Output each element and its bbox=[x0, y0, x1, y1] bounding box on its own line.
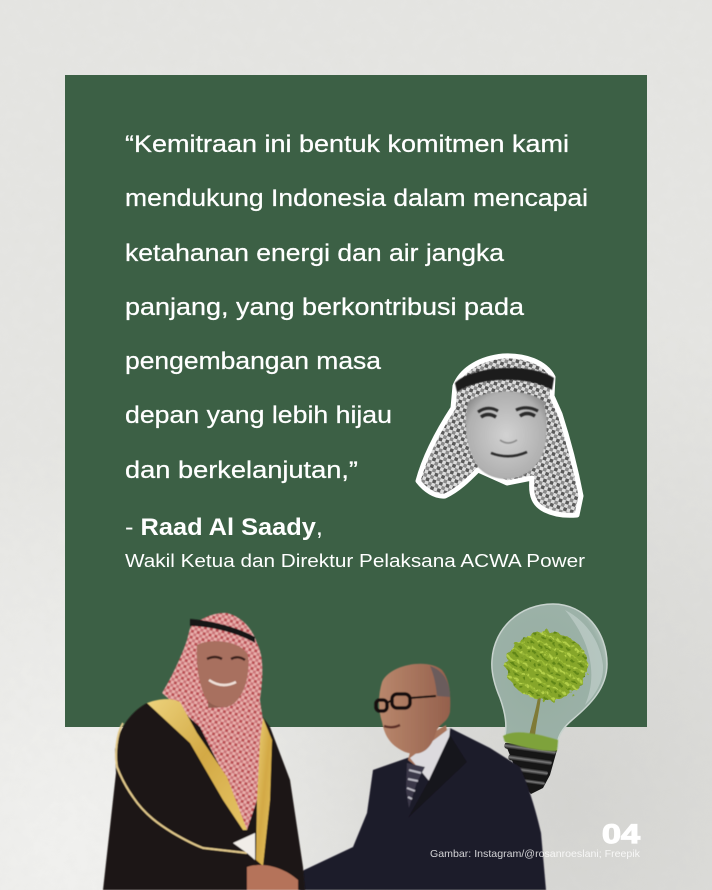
headscarf with white sticker outline bbox=[418, 356, 581, 515]
hair bbox=[430, 666, 450, 697]
gold collar left bbox=[147, 699, 247, 830]
grass bbox=[503, 732, 558, 751]
glasses bbox=[376, 694, 436, 711]
portrait: grayscale sticker of Raad Al Saady bbox=[418, 356, 581, 515]
image credit: Gambar: Instagram/@rosanroeslani; Freepik bbox=[430, 848, 641, 860]
white cuff bbox=[233, 833, 255, 860]
page number: 04 bbox=[602, 819, 640, 849]
glass bbox=[492, 604, 607, 748]
panel: green quote background bbox=[65, 75, 647, 727]
suit bbox=[300, 728, 546, 890]
gold collar right bbox=[256, 718, 272, 866]
quote text block: panjang, yang berkontribusi pada bbox=[125, 294, 524, 321]
quote text block: pengembangan masa bbox=[125, 348, 381, 375]
striped tie bbox=[406, 763, 425, 808]
face features bbox=[478, 408, 538, 456]
face features bbox=[207, 657, 245, 685]
quote text block: mendukung Indonesia dalam mencapai bbox=[125, 185, 588, 212]
glass highlight bbox=[565, 610, 603, 705]
neck bbox=[208, 695, 232, 708]
face bbox=[466, 392, 547, 479]
quote text block: ketahanan energi dan air jangka bbox=[125, 240, 504, 267]
icon: light bulb with tree bbox=[492, 604, 607, 794]
attribution: speaker title: Wakil Ketua dan Direktur Pelaksana ACWA Power bbox=[125, 551, 585, 571]
head bbox=[379, 664, 450, 754]
photo: man in suit bbox=[300, 664, 546, 890]
white thobe bbox=[208, 705, 248, 826]
lapel shade bbox=[408, 735, 467, 818]
face bbox=[197, 641, 248, 707]
tree crown bbox=[506, 632, 588, 700]
quote text block: dan berkelanjutan,” bbox=[125, 457, 358, 484]
quote text block: depan yang lebih hijau bbox=[125, 402, 392, 429]
headband bbox=[455, 368, 554, 392]
screw base bbox=[504, 742, 557, 794]
handshake bbox=[247, 865, 298, 890]
black robe bbox=[103, 703, 305, 890]
headscarf bbox=[162, 613, 265, 830]
quote text block: “Kemitraan ini bentuk komitmen kami bbox=[125, 131, 569, 158]
attribution: speaker name: - Raad Al Saady, bbox=[125, 514, 323, 541]
mouth bbox=[384, 725, 400, 727]
quote text block bbox=[125, 131, 588, 484]
collar bbox=[410, 728, 450, 782]
neck bbox=[408, 725, 448, 775]
trunk bbox=[529, 697, 541, 736]
robe trim bbox=[116, 723, 247, 853]
headband bbox=[190, 619, 255, 643]
photo: man in traditional robe bbox=[103, 613, 305, 890]
